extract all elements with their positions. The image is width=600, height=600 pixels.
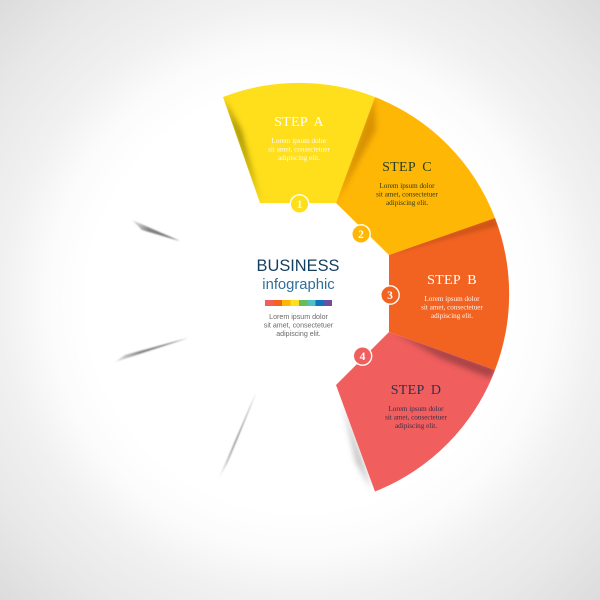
shadow beside step D xyxy=(342,400,372,490)
panel shadow: step B top edge xyxy=(404,218,498,251)
text: step D: Lorem ipsum dolor xyxy=(388,405,444,413)
panel: step D xyxy=(336,331,497,492)
badge 4 xyxy=(353,347,372,365)
text: step A: Lorem ipsum dolor xyxy=(271,137,327,145)
heading: step B: STEP B xyxy=(427,273,477,288)
panel shadow: step A left edge xyxy=(224,100,260,196)
badge 2 xyxy=(352,225,370,243)
badge 3 xyxy=(381,286,399,304)
panel: step A xyxy=(222,83,375,203)
center text: sit amet, consectetuer xyxy=(264,322,334,330)
text: step D: adipiscing elit. xyxy=(395,422,437,430)
text: step B: adipiscing elit. xyxy=(431,312,473,320)
heading: step C: STEP C xyxy=(382,160,432,175)
panel: step C xyxy=(336,96,495,255)
text: step C: Lorem ipsum dolor xyxy=(379,182,435,190)
badge 1: 1 xyxy=(297,199,303,211)
badge 1 xyxy=(290,195,309,213)
panel shadow: step D top edge xyxy=(398,336,495,380)
shadow wedge: middle left xyxy=(115,338,188,362)
text: step A: adipiscing elit. xyxy=(278,154,320,162)
subtitle: infographic xyxy=(262,277,335,293)
text: step D: sit amet, consectetuer xyxy=(385,414,447,422)
badge 4: 4 xyxy=(360,351,366,363)
text: step A: sit amet, consectetuer xyxy=(268,146,330,154)
shadow wedge: upper left xyxy=(132,220,180,241)
text: step C: adipiscing elit. xyxy=(386,199,428,207)
text: step B: Lorem ipsum dolor xyxy=(424,295,480,303)
center text: Lorem ipsum dolor xyxy=(269,313,329,321)
title: BUSINESS xyxy=(257,257,340,275)
text: step C: sit amet, consectetuer xyxy=(376,190,438,198)
heading: step A: STEP A xyxy=(274,115,324,130)
text: step B: sit amet, consectetuer xyxy=(421,304,483,312)
panel shadow: step C left edge xyxy=(340,100,378,195)
rainbow bar xyxy=(265,300,332,306)
badge 2: 2 xyxy=(358,229,364,241)
badge 3: 3 xyxy=(387,290,393,302)
shadow wedge: lower left xyxy=(218,393,256,480)
heading: step D: STEP D xyxy=(391,383,441,398)
panel: step B xyxy=(389,218,509,370)
center text: adipiscing elit. xyxy=(276,330,321,338)
